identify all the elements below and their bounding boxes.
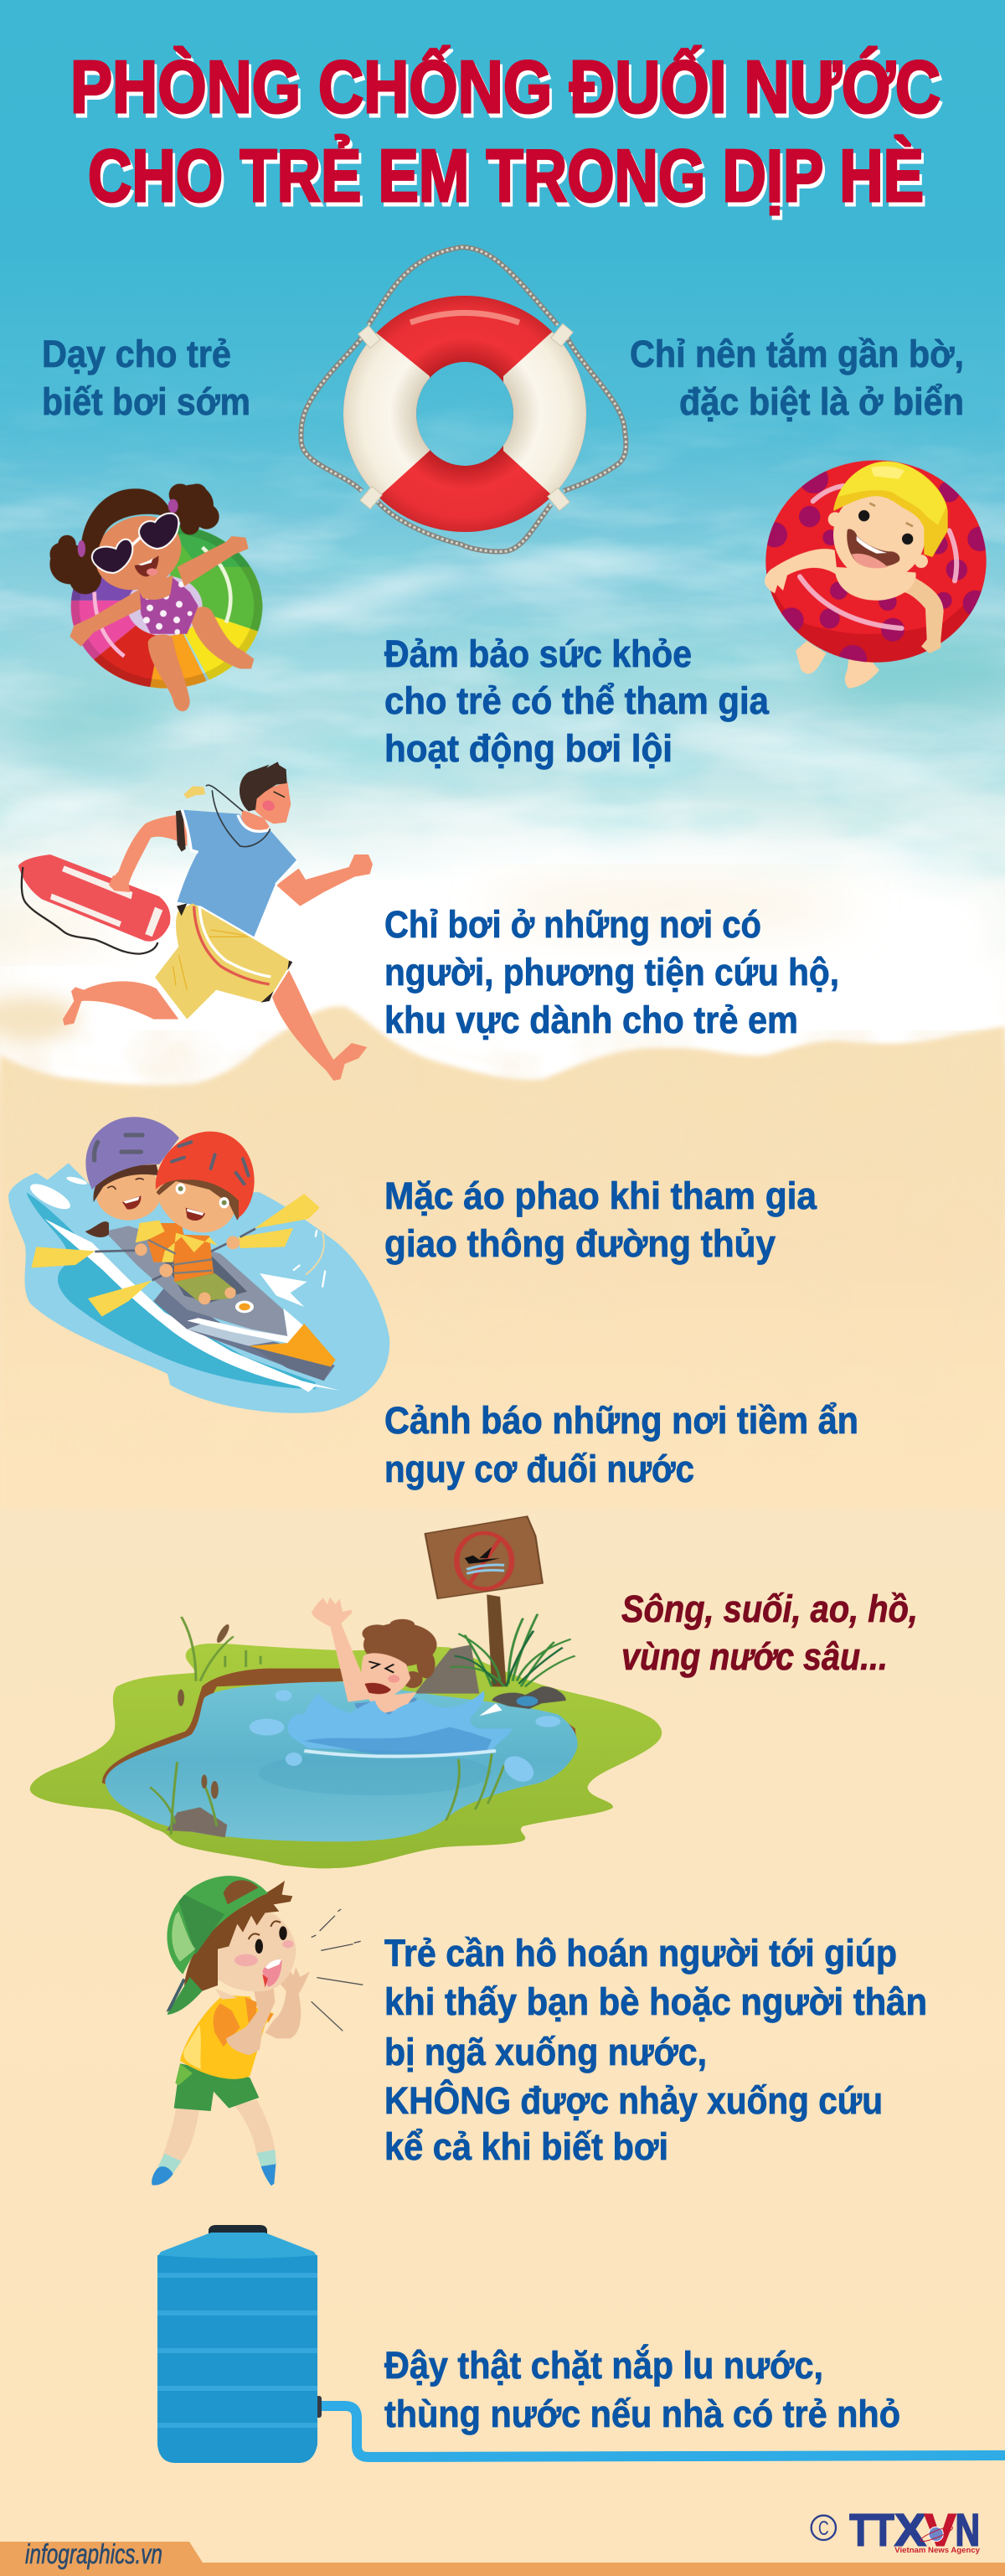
- illustration: girl with sunglasses on rainbow ring: [50, 484, 263, 712]
- text: warn about drowning risk places: nguy cơ đuối nước: [384, 1448, 694, 1490]
- illustration: running lifeguard with rescue board: [18, 761, 373, 1081]
- text: close water containers tightly: Đậy thật chặt nắp lu nước,: [384, 2344, 823, 2387]
- footer band with site name: infographics.vn: [25, 2538, 162, 2569]
- illustration: blue water tank with pipe: [157, 2225, 1005, 2463]
- illustration: two children in helmets paddling a kayak: [8, 1117, 389, 1413]
- logo: TTXVN Vietnam News Agency: [812, 2505, 980, 2555]
- icon: lifebuoy with rope: [301, 247, 626, 551]
- text: call for help, do not jump in: [384, 1932, 927, 2168]
- text: wear life jackets on waterways: [384, 1174, 817, 1265]
- text: call for help, do not jump in: kể cả khi biết bơi: [384, 2125, 668, 2168]
- footer band with site name: [0, 2538, 1005, 2576]
- text: teach children to swim early: biết bơi sớm: [42, 380, 250, 423]
- logo: TTXVN Vietnam News Agency: N: [956, 2505, 980, 2555]
- text: rivers, streams, ponds, lakes, deep water: Sông, suối, ao, hồ,: [621, 1587, 918, 1630]
- text: warn about drowning risk places: Cảnh báo những nơi tiềm ẩn: [384, 1399, 858, 1442]
- text: wear life jackets on waterways: giao thông đường thủy: [384, 1222, 776, 1265]
- text: bathe only near the shore: Chỉ nên tắm gần bờ,: [630, 333, 964, 375]
- logo: TTXVN Vietnam News Agency: X: [894, 2505, 926, 2555]
- text: rivers, streams, ponds, lakes, deep water: [621, 1587, 918, 1678]
- text: call for help, do not jump in: KHÔNG được nhảy xuống cứu: [384, 2079, 883, 2122]
- text: ensure child health: [384, 632, 770, 770]
- text: swim only where rescuers are present: khu vực dành cho trẻ em: [384, 999, 798, 1041]
- text: ensure child health: hoạt động bơi lội: [384, 727, 673, 770]
- logo: TTXVN Vietnam News Agency: V: [925, 2505, 956, 2555]
- logo: TTXVN Vietnam News Agency: Vietnam News Agency: [894, 2546, 980, 2554]
- text: teach children to swim early: Dạy cho trẻ: [42, 333, 231, 375]
- text: call for help, do not jump in: Trẻ cần hô hoán người tới giúp: [384, 1932, 897, 1975]
- title: [70, 45, 943, 221]
- text: ensure child health: Đảm bảo sức khỏe: [384, 632, 692, 675]
- text: call for help, do not jump in: khi thấy bạn bè hoặc người thân: [384, 1980, 927, 2023]
- logo: TTXVN Vietnam News Agency: TT: [849, 2505, 894, 2555]
- text: teach children to swim early: [42, 333, 250, 423]
- illustration: child drowning in pond with warning sign: [30, 1516, 662, 1868]
- text: bathe only near the shore: [630, 333, 964, 423]
- text: warn about drowning risk places: [384, 1399, 858, 1490]
- text: swim only where rescuers are present: người, phương tiện cứu hộ,: [384, 951, 839, 994]
- text: swim only where rescuers are present: [384, 903, 839, 1041]
- text: rivers, streams, ponds, lakes, deep water: vùng nước sâu...: [621, 1635, 888, 1678]
- illustration: blond boy on red polka-dot ring: [762, 458, 992, 689]
- text: call for help, do not jump in: bị ngã xuống nước,: [384, 2031, 707, 2073]
- text: close water containers tightly: [384, 2344, 900, 2435]
- text: close water containers tightly: thùng nước nếu nhà có trẻ nhỏ: [384, 2393, 900, 2435]
- text: ensure child health: cho trẻ có thể tham gia: [384, 679, 770, 722]
- text: swim only where rescuers are present: Chỉ bơi ở những nơi có: [384, 903, 761, 946]
- illustration: boy in green cap shouting for help: [152, 1876, 363, 2186]
- logo: TTXVN Vietnam News Agency: C: [818, 2517, 829, 2540]
- text: bathe only near the shore: đặc biệt là ở biển: [679, 380, 964, 423]
- text: wear life jackets on waterways: Mặc áo phao khi tham gia: [384, 1174, 817, 1217]
